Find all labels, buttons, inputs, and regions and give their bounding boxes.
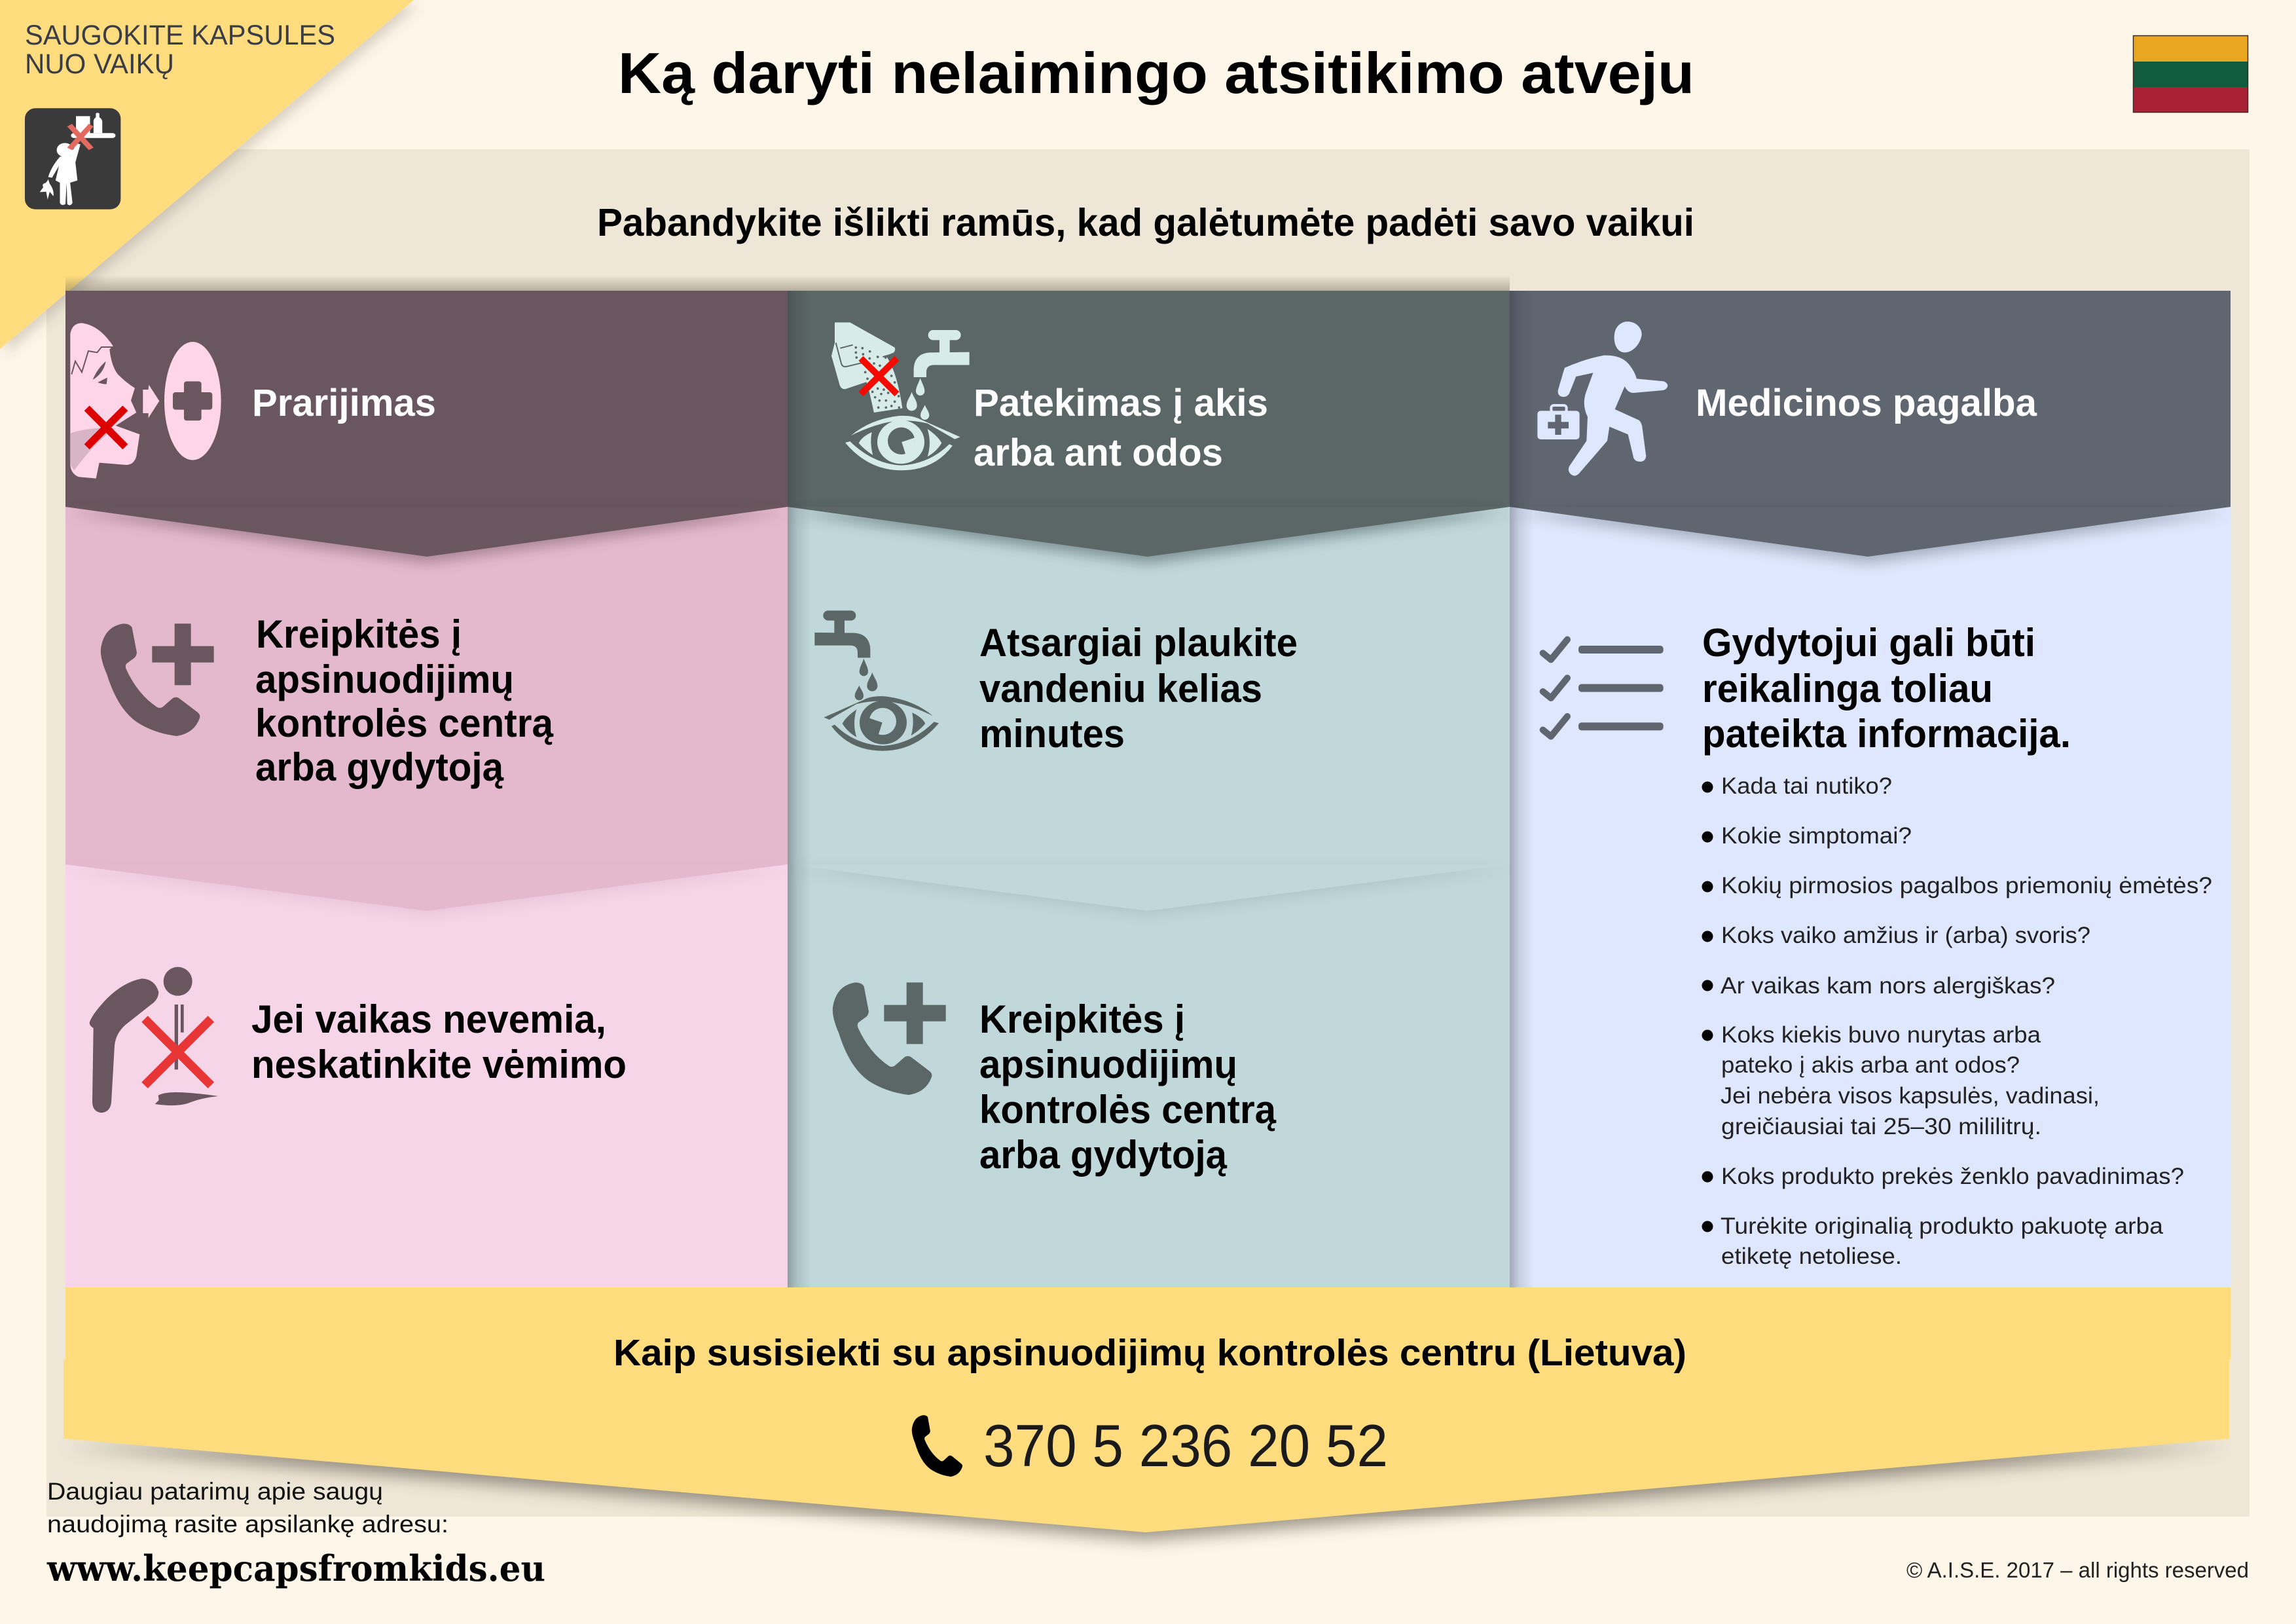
text: rinse with water: minutes [979, 712, 1125, 756]
icon: capsule, tap and eye [831, 322, 970, 470]
text: contact poison centre: apsinuodijimų [255, 657, 514, 701]
panel: medical help column [1510, 291, 2231, 1287]
list: questions: Kokie simptomai? [1721, 823, 1912, 849]
text: do not induce vomiting: neskatinkite vėmimo [251, 1043, 627, 1086]
icon: face swallowing with cross [70, 323, 221, 479]
panel: eyes or skin column [788, 291, 1510, 1287]
list: questions: Koks produkto prekės ženklo pavadinimas? [1721, 1164, 2184, 1189]
corner warning text: NUO VAIKŲ [25, 48, 174, 80]
text: doctor may need information: pateikta informacija. [1702, 712, 2071, 756]
text: more safety tips [47, 1478, 448, 1538]
list: questions: Koks kiekis buvo nurytas arba [1721, 1022, 2041, 1048]
icon: do not induce vomiting [90, 967, 218, 1113]
text: contact poison centre: Kreipkitės į [979, 997, 1185, 1041]
yellow corner triangle [0, 0, 414, 349]
text: rinse with water: Atsargiai plaukite [979, 621, 1298, 665]
icon: phone with plus [101, 623, 214, 736]
text: contact poison centre: Kreipkitės į [256, 612, 462, 656]
icon: tap rinsing eye [814, 610, 939, 751]
icon: black phone [912, 1415, 962, 1477]
heading: eyes or skin: arba ant odos [974, 432, 1223, 474]
list: questions: Kada tai nutiko? [1721, 773, 1892, 799]
list: questions: etiketę netoliese. [1721, 1244, 1902, 1269]
icon: child reaching for shelf [25, 108, 120, 210]
text: contact poison centre: kontrolės centrą [979, 1088, 1277, 1132]
shadow under yellow banner [62, 1447, 2228, 1540]
corner warning text: SAUGOKITE KAPSULES [25, 20, 335, 51]
text: rinse with water: vandeniu kelias [979, 667, 1262, 710]
icon: Lithuanian flag [2133, 35, 2248, 113]
copyright: © A.I.S.E. 2017 – all rights reserved [1906, 1558, 2249, 1582]
icon: phone with plus [833, 982, 946, 1095]
text: more safety tips: Daugiau patarimų apie saugų [47, 1478, 383, 1505]
heading: swallowing: Prarijimas [252, 382, 436, 424]
website address: www.keepcapsfromkids.eu [46, 1547, 545, 1589]
heading: eyes or skin [974, 382, 1268, 474]
text: doctor may need information [1702, 621, 2071, 756]
subtitle: Pabandykite išlikti ramūs, kad galėtumėte padėti savo vaikui [597, 201, 1694, 244]
text: do not induce vomiting [251, 997, 627, 1086]
text: contact poison centre: apsinuodijimų [979, 1043, 1237, 1086]
heading: medical help: Medicinos pagalba [1696, 382, 2037, 424]
heading: eyes or skin: Patekimas į akis [974, 382, 1268, 424]
text: contact poison centre: kontrolės centrą [255, 701, 554, 745]
phone number: 370 5 236 20 52 [983, 1413, 1388, 1479]
text: rinse with water [979, 621, 1298, 756]
text: contact poison centre: arba gydytoją [979, 1133, 1228, 1177]
corner warning text [25, 20, 335, 80]
text: do not induce vomiting: Jei vaikas nevemia, [251, 997, 606, 1041]
list: questions [1702, 773, 2212, 1269]
text: doctor may need information: reikalinga toliau [1702, 667, 1993, 710]
title: Ką daryti nelaimingo atsitikimo atveju [618, 41, 1694, 105]
text: contact poison centre: arba gydytoją [255, 745, 504, 789]
list: questions: greičiausiai tai 25–30 mililitrų. [1721, 1114, 2041, 1139]
list: questions: Turėkite originalią produkto pakuotę arba [1721, 1213, 2164, 1239]
shadow above columns [65, 275, 1510, 291]
panel: yellow contact banner [64, 1287, 2231, 1532]
panel: swallowing column [65, 291, 788, 1287]
list: questions: Ar vaikas kam nors alergiškas? [1721, 973, 2055, 999]
icon: checklist [1543, 640, 1664, 737]
list: questions: Kokių pirmosios pagalbos priemonių ėmėtės? [1721, 873, 2212, 898]
list: questions: Koks vaiko amžius ir (arba) svoris? [1721, 923, 2090, 948]
heading: contact poison centre: Kaip susisiekti su apsinuodijimų kontrolės centru (Lietuva) [613, 1332, 1686, 1374]
icon: runner with first aid kit [1537, 322, 1667, 476]
text: contact poison centre [255, 612, 554, 789]
text: doctor may need information: Gydytojui gali būti [1702, 621, 2035, 665]
text: contact poison centre [979, 997, 1277, 1177]
list: questions: Jei nebėra visos kapsulės, vadinasi, [1721, 1083, 2100, 1109]
text: more safety tips: naudojimą rasite apsilankę adresu: [47, 1511, 448, 1538]
list: questions: pateko į akis arba ant odos? [1721, 1052, 2020, 1078]
